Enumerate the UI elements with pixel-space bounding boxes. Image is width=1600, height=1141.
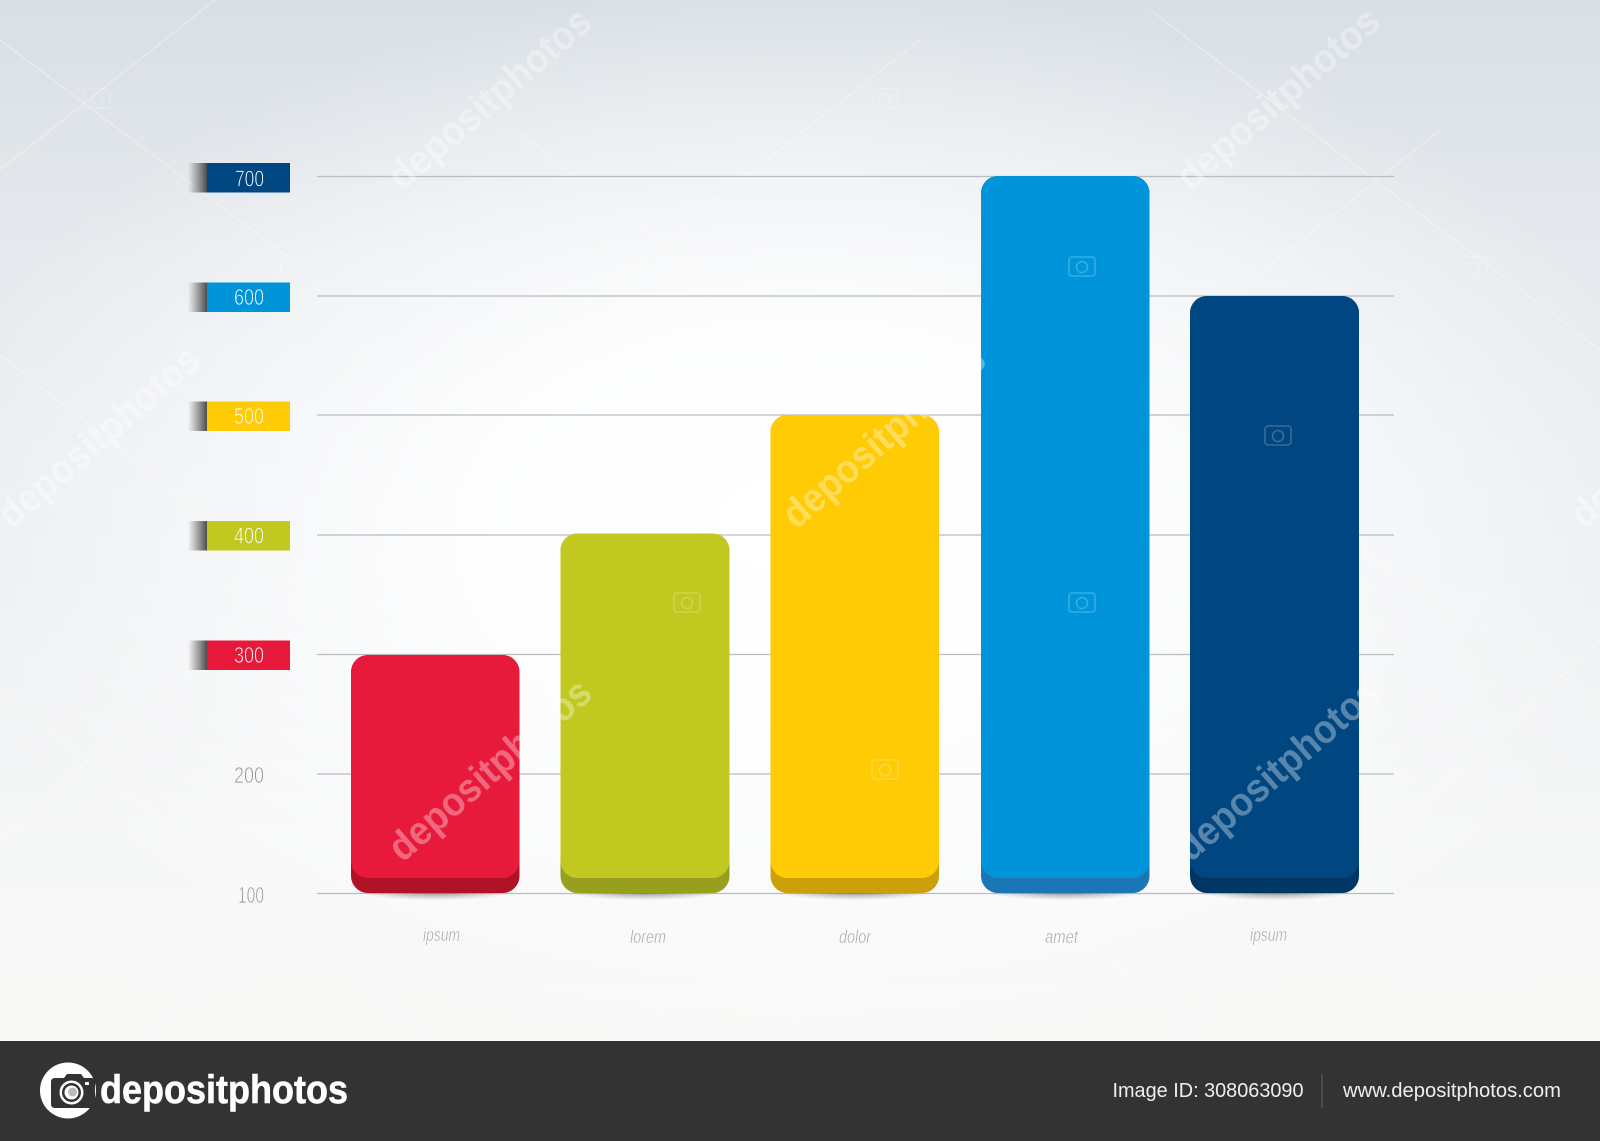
label: ipsum: ipsum bbox=[1250, 925, 1287, 945]
website: www.depositphotos.com bbox=[1342, 1080, 1561, 1102]
tag: 400 bbox=[188, 521, 290, 550]
watermark camera icons bbox=[84, 89, 1487, 949]
label: ipsum: ipsum bbox=[423, 925, 460, 945]
bar: dolor 500 bbox=[770, 415, 939, 900]
tag: 700: 700 bbox=[235, 166, 264, 192]
tag: 500 bbox=[188, 402, 290, 431]
label: dolor: dolor bbox=[839, 927, 872, 947]
tag: 700 bbox=[188, 163, 290, 192]
bar: amet 700 bbox=[981, 176, 1150, 900]
bar chart bbox=[351, 176, 1359, 900]
tag: 500: 500 bbox=[234, 403, 264, 429]
icon: camera logo bbox=[40, 1062, 96, 1118]
footer bar bbox=[0, 1041, 1600, 1141]
bar: ipsum 600 bbox=[1190, 296, 1359, 900]
watermark text bbox=[0, 0, 1600, 870]
watermark text: depositphotos bbox=[774, 337, 994, 537]
tag: 400: 400 bbox=[234, 522, 264, 548]
divider bbox=[1321, 1074, 1323, 1108]
tag: 600: 600 bbox=[234, 284, 264, 310]
tag: 300 bbox=[188, 640, 290, 670]
label: amet: amet bbox=[1045, 927, 1079, 947]
bar: lorem 400 bbox=[560, 534, 730, 900]
label: lorem: lorem bbox=[630, 927, 666, 947]
image id: Image ID: 308063090 bbox=[1112, 1080, 1304, 1102]
watermark text: depositphotos bbox=[380, 670, 600, 870]
label: 200: 200 bbox=[234, 762, 264, 788]
bar: ipsum 300 bbox=[351, 655, 520, 900]
tag: 300: 300 bbox=[234, 642, 264, 668]
grid lines bbox=[317, 176, 1394, 894]
watermark text: depositphotos bbox=[1168, 670, 1388, 870]
label: 100: 100 bbox=[238, 882, 264, 908]
y axis labels bbox=[188, 163, 290, 908]
logo wordmark: depositphotos bbox=[100, 1068, 348, 1112]
tag: 600 bbox=[188, 282, 290, 312]
category labels bbox=[423, 925, 1287, 947]
